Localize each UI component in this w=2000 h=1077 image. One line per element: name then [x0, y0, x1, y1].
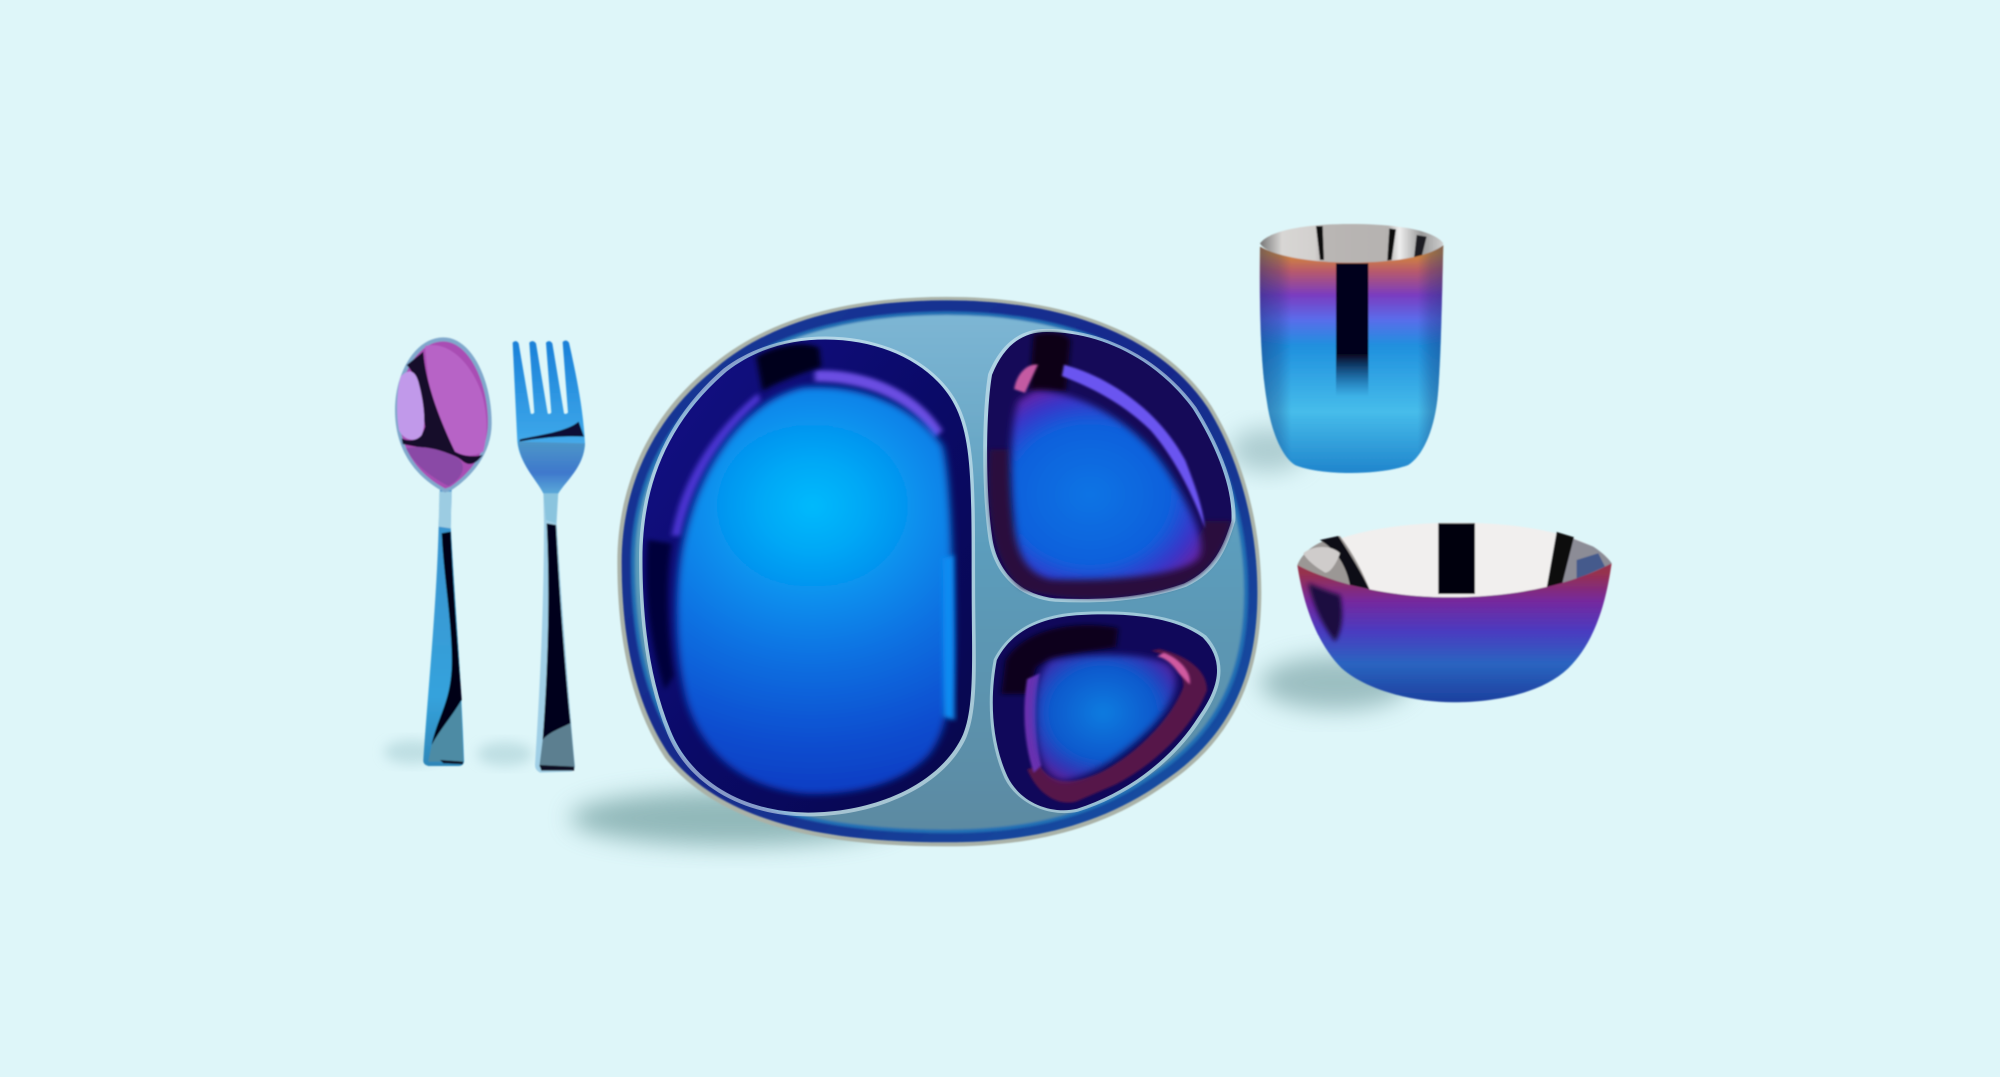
- plate outer rim: [617, 297, 1261, 846]
- bowl interior: [1297, 523, 1612, 598]
- handle: [535, 492, 575, 773]
- bowl: [1297, 523, 1612, 702]
- cup: [1260, 224, 1443, 473]
- fork: [513, 340, 585, 773]
- spoon: [395, 337, 492, 766]
- bowl: [395, 337, 492, 493]
- cup interior: [1260, 224, 1443, 265]
- bowl body: [1297, 563, 1612, 702]
- plate body: [633, 313, 1246, 831]
- big compartment: [639, 336, 976, 816]
- handle: [423, 488, 464, 766]
- cup body: [1260, 245, 1443, 473]
- cup dark reflection: [1336, 263, 1368, 397]
- plate: [617, 297, 1261, 846]
- lower right compartment: [990, 611, 1220, 813]
- head: [513, 340, 585, 493]
- shadows: [384, 428, 1410, 846]
- upper right compartment: [983, 329, 1236, 602]
